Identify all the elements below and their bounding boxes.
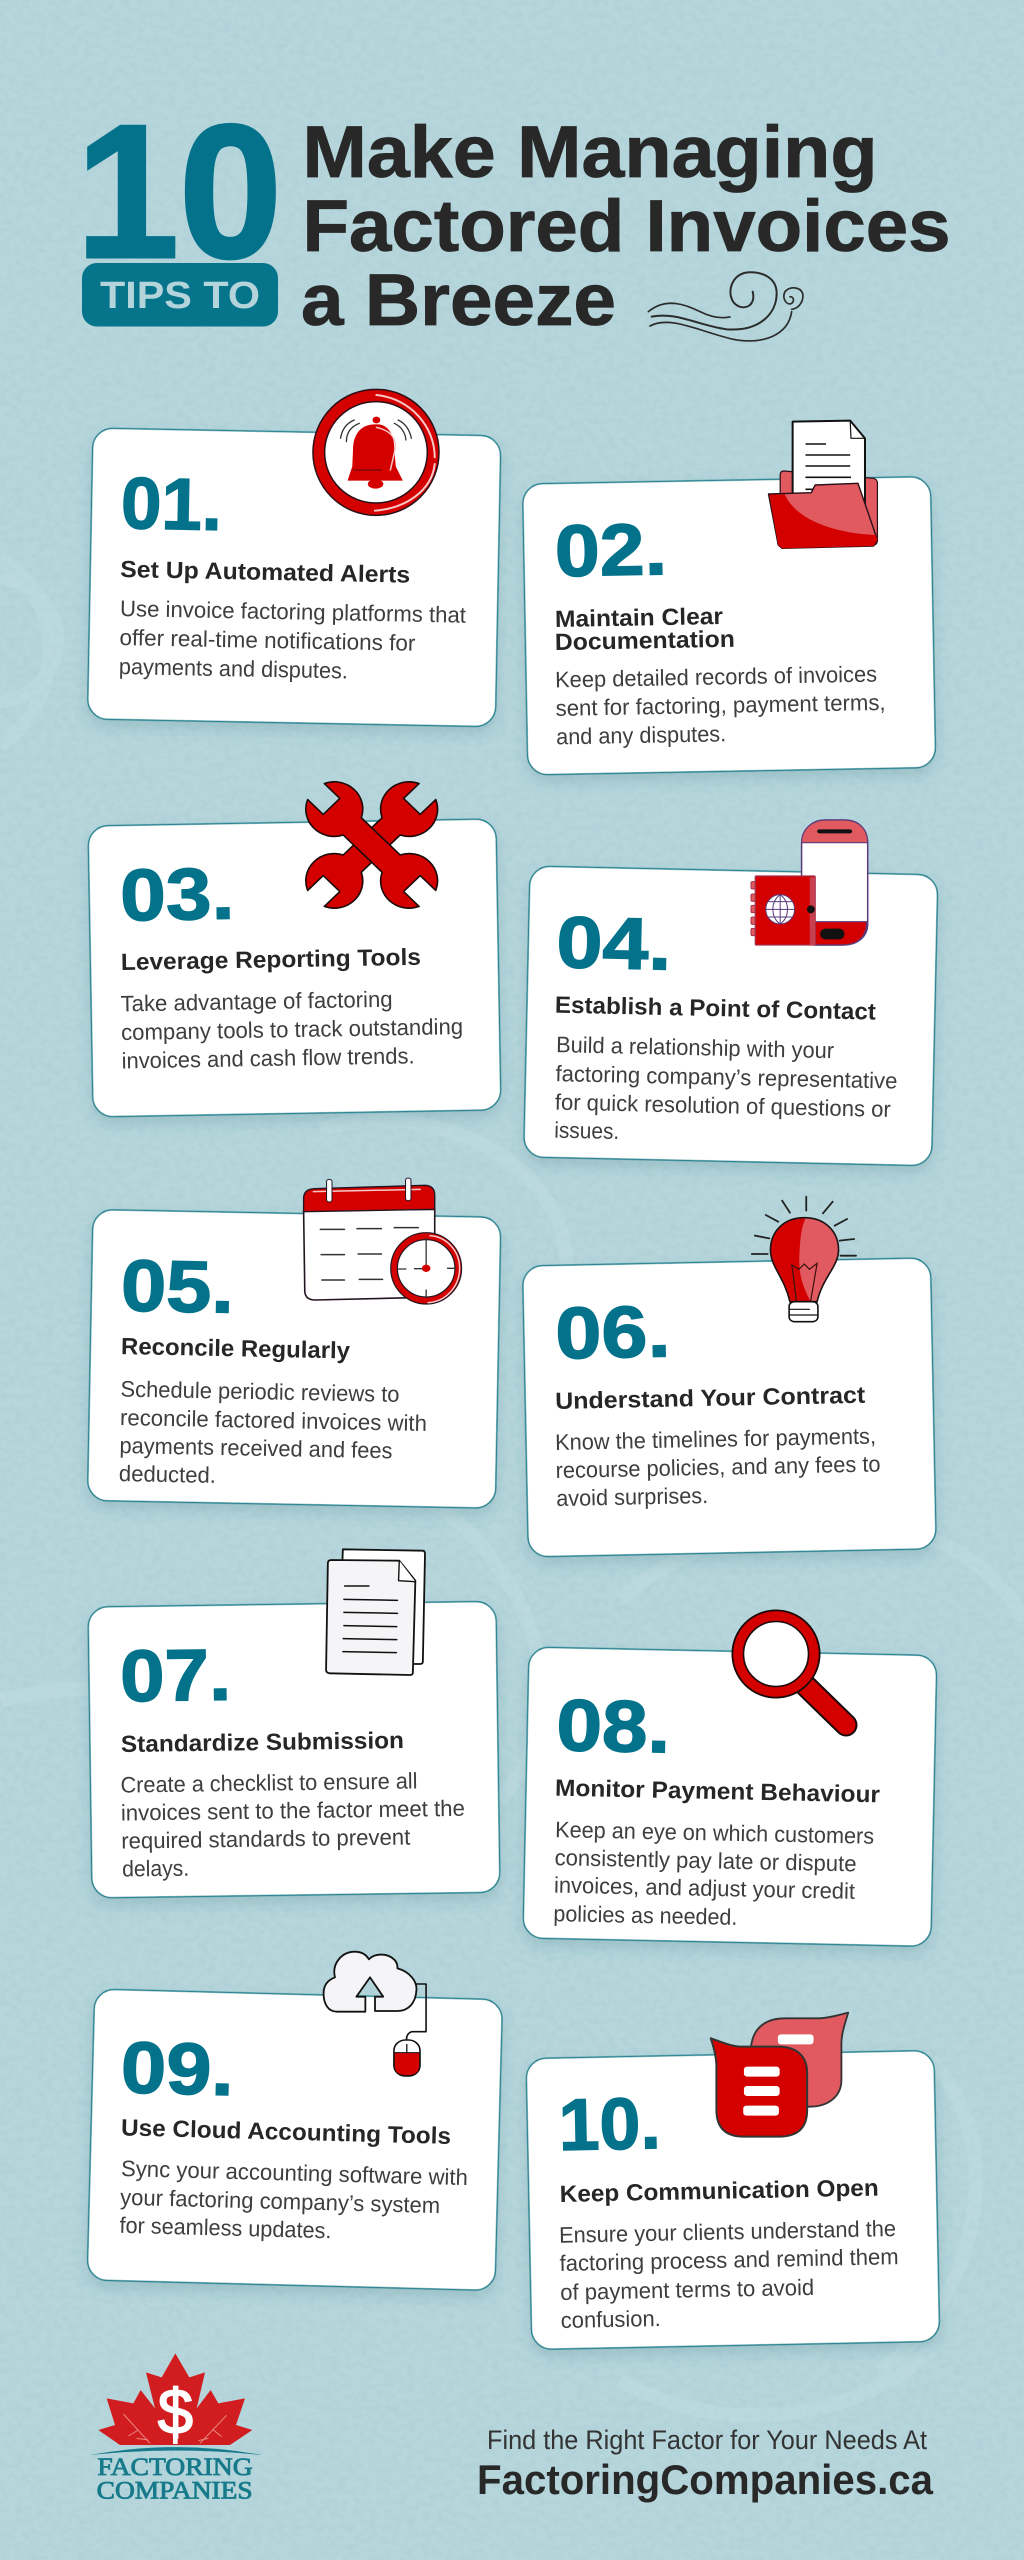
body 09: for seamless updates. xyxy=(119,2213,332,2243)
body 04: for quick resolution of questions or xyxy=(555,1090,892,1122)
body 02 xyxy=(555,661,886,749)
heading 08: Monitor Payment Behaviour xyxy=(555,1775,880,1807)
body 06: recourse policies, and any fees to xyxy=(555,1451,881,1483)
panel: tip 01 xyxy=(87,428,501,727)
body 04 xyxy=(554,1032,898,1150)
tips to badge: TIPS TO xyxy=(100,275,260,317)
title: Make Managing xyxy=(302,112,878,193)
heading 05: Reconcile Regularly xyxy=(121,1333,350,1363)
body 03: invoices and cash flow trends. xyxy=(121,1043,415,1073)
maple leaf xyxy=(98,2353,252,2445)
body 08: invoices, and adjust your credit xyxy=(554,1873,856,1904)
number 08: 08. xyxy=(556,1685,671,1768)
panel: tip 03 xyxy=(88,819,501,1117)
panel: tip 02 xyxy=(522,477,936,775)
heading 07: Standardize Submission xyxy=(121,1727,404,1757)
body 01: offer real-time notifications for xyxy=(119,625,416,656)
dollar sign: $ xyxy=(158,2377,193,2447)
logo wordmark: COMPANIES xyxy=(97,2476,253,2504)
icon: cloud upload with mouse xyxy=(324,1952,426,2076)
body 01: Use invoice factoring platforms that xyxy=(120,596,467,628)
body 02: Keep detailed records of invoices xyxy=(555,662,877,692)
icon: magnifying glass xyxy=(732,1610,846,1725)
number 03: 03. xyxy=(120,853,235,936)
body 07 xyxy=(120,1768,466,1882)
body 02: sent for factoring, payment terms, xyxy=(555,690,886,721)
body 06: Know the timelines for payments, xyxy=(555,1424,876,1455)
icon: crossed wrenches xyxy=(296,772,448,918)
icon: phone and notebook xyxy=(751,820,868,945)
heading 04: Establish a Point of Contact xyxy=(555,992,876,1025)
panel: tip 04 xyxy=(524,866,938,1166)
body 05: deducted. xyxy=(119,1461,216,1488)
title: Factored Invoices xyxy=(302,186,950,267)
body 06 xyxy=(555,1423,881,1511)
logo wordmark xyxy=(97,2453,253,2504)
body 10: factoring process and remind them xyxy=(559,2244,899,2276)
icon: wind swirl xyxy=(648,272,803,341)
heading 06: Understand Your Contract xyxy=(555,1382,866,1414)
body 03: Take advantage of factoring xyxy=(120,987,393,1016)
icon: documents xyxy=(326,1549,425,1675)
call to action text: Find the Right Factor for Your Needs At xyxy=(487,2425,927,2455)
body 09: Sync your accounting software with xyxy=(121,2156,468,2190)
body 07: delays. xyxy=(122,1856,189,1882)
number 05: 05. xyxy=(120,1246,235,1329)
body 07: required standards to prevent xyxy=(121,1825,411,1854)
body 05: payments received and fees xyxy=(119,1433,393,1463)
title: big 10: 10 xyxy=(76,86,282,298)
heading 10: Keep Communication Open xyxy=(559,2175,879,2207)
body 06: avoid surprises. xyxy=(556,1483,708,1511)
icon: alert bell xyxy=(313,389,439,515)
body 10: confusion. xyxy=(561,2306,661,2333)
panel: tip 05 xyxy=(87,1210,501,1508)
title: a Breeze xyxy=(301,260,616,341)
icon: light bulb xyxy=(752,1197,856,1322)
body 05 xyxy=(119,1377,428,1492)
body 04: Build a relationship with your xyxy=(556,1032,835,1063)
number 10: 10. xyxy=(558,2083,661,2166)
heading 02 xyxy=(554,603,735,655)
icon: folder with document xyxy=(769,421,877,548)
heading 03: Leverage Reporting Tools xyxy=(121,944,421,975)
logo arc xyxy=(90,2447,262,2455)
panel: tip 10 xyxy=(526,2050,940,2350)
heading 09: Use Cloud Accounting Tools xyxy=(121,2114,451,2149)
body 05: reconcile factored invoices with xyxy=(120,1405,427,1436)
body 10 xyxy=(559,2216,900,2333)
body 01: payments and disputes. xyxy=(119,654,348,683)
icon: calendar and clock xyxy=(304,1178,462,1304)
panel: tip 07 xyxy=(88,1601,500,1898)
body 04: factoring company’s representative xyxy=(555,1061,898,1094)
body 10: of payment terms to avoid xyxy=(560,2275,814,2305)
logo: Factoring Companies xyxy=(90,2353,262,2504)
number 09: 09. xyxy=(120,2027,235,2111)
panel: tip 09 xyxy=(87,1989,503,2291)
panel: tip 06 xyxy=(522,1258,936,1557)
logo wordmark: FACTORING xyxy=(97,2453,253,2481)
body 04: issues. xyxy=(554,1118,620,1144)
body 09: your factoring company’s system xyxy=(120,2185,440,2218)
number 02: 02. xyxy=(554,509,668,592)
body 08 xyxy=(553,1817,874,1933)
heading 02: Documentation xyxy=(555,626,735,655)
body 10: Ensure your clients understand the xyxy=(559,2216,896,2248)
heading 01: Set Up Automated Alerts xyxy=(120,556,410,588)
body 08: policies as needed. xyxy=(553,1901,738,1930)
body 08: Keep an eye on which customers xyxy=(555,1817,874,1849)
number 04: 04. xyxy=(556,902,672,986)
body 08: consistently pay late or dispute xyxy=(554,1845,857,1876)
tips to badge xyxy=(82,263,278,326)
number 07: 07. xyxy=(120,1635,232,1717)
body 07: Create a checklist to ensure all xyxy=(120,1768,418,1798)
body 09 xyxy=(119,2156,468,2247)
body 03 xyxy=(120,985,464,1073)
body 05: Schedule periodic reviews to xyxy=(120,1377,400,1407)
body 02: and any disputes. xyxy=(556,721,726,749)
title xyxy=(301,112,950,341)
icon: chat bubbles xyxy=(711,2013,848,2137)
heading 02: Maintain Clear xyxy=(555,603,723,632)
number 01: 01. xyxy=(120,463,223,546)
panel: tip 08 xyxy=(523,1647,937,1946)
body 07: invoices sent to the factor meet the xyxy=(121,1796,465,1826)
website url: FactoringCompanies.ca xyxy=(477,2456,934,2503)
body 01 xyxy=(119,596,467,686)
body 03: company tools to track outstanding xyxy=(121,1014,463,1045)
number 06: 06. xyxy=(555,1291,671,1375)
